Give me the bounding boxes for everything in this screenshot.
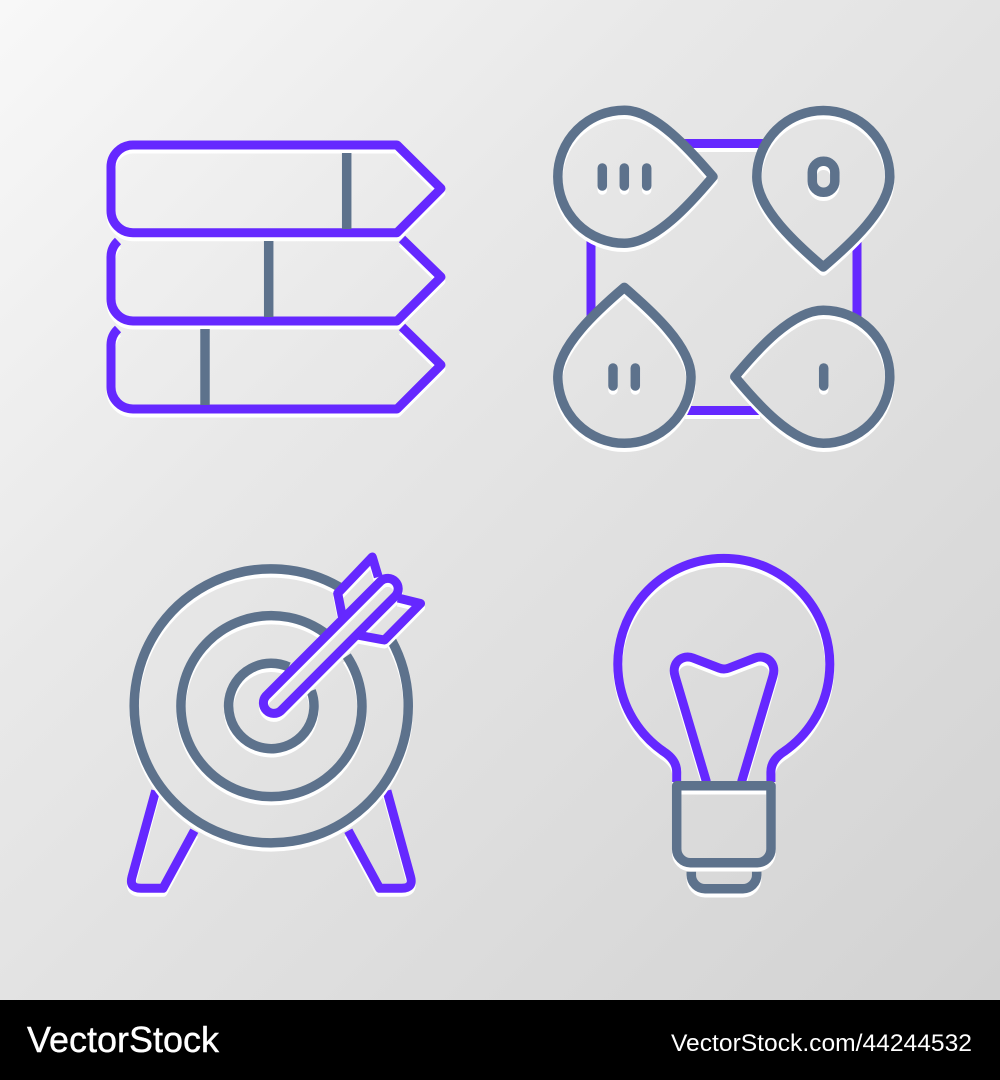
middle arrow bar <box>111 239 441 321</box>
icon: light bulb <box>618 558 830 889</box>
bulb contact cap <box>691 872 757 889</box>
footer logo text: VectorStock <box>27 1019 220 1060</box>
pin: step two <box>558 287 691 443</box>
pin: step one <box>735 310 890 443</box>
icon: archery target with arrow <box>131 557 420 888</box>
bulb screw base <box>677 786 771 863</box>
connecting square segments <box>591 144 857 410</box>
target stand legs <box>131 791 411 888</box>
pin: step three <box>558 110 713 243</box>
pin: step zero <box>757 111 890 267</box>
bottom arrow bar <box>111 327 441 409</box>
icon: four-step map pins on a square <box>558 110 890 443</box>
arrow with fletching <box>263 557 420 713</box>
footer image id text: VectorStock.com/44244532 <box>671 1030 972 1057</box>
bulb glass and filament <box>618 558 830 782</box>
target rings <box>134 569 408 843</box>
top arrow bar <box>111 145 441 233</box>
icon: stacked arrow progress bars <box>111 145 441 409</box>
footer bar <box>0 1000 1000 1080</box>
